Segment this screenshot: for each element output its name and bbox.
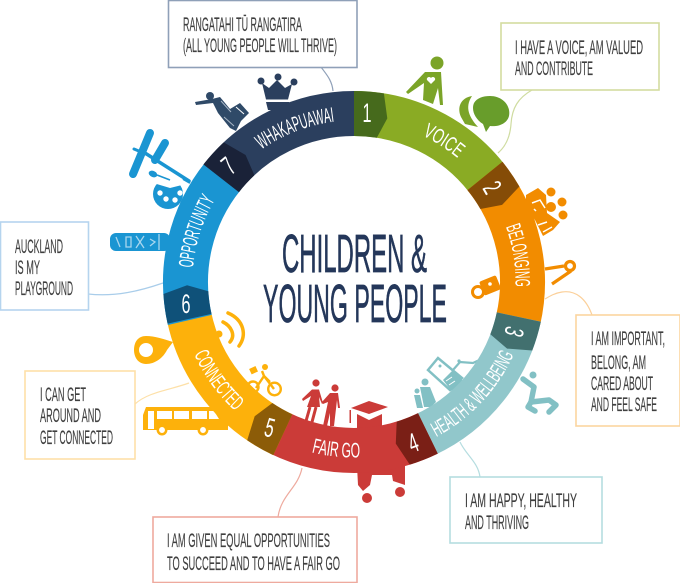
icon: cyclist [248,364,281,395]
icon: palette [148,169,190,209]
icon: carved totem [110,233,170,251]
ring label: health and wellbeing: HEALTH & WELLBEING [430,350,512,437]
callout: connected: AROUND AND [40,406,101,427]
callout: rangatahi: (ALL YOUNG PEOPLE WILL THRIVE) [183,36,337,57]
icon: map pin [134,336,173,364]
callout: voice [501,23,659,90]
connector: top box [321,67,333,91]
connector: auckland box [88,283,163,295]
icon: wifi [216,313,243,346]
icon: padlock [472,275,501,298]
ring label: whakapuawai: WHAKAPUAWAI [254,107,334,148]
number tab 5 [243,399,293,455]
ring segment: voice [354,114,487,178]
callout: health: I AM HAPPY, HEALTHY [465,491,577,512]
ring label: fair go: FAIR GO [312,438,360,458]
number tab 3 [488,312,541,354]
connector: health box [460,442,480,477]
callout: connected: I CAN GET [40,385,86,406]
title: CHILDREN & [282,224,427,284]
icon: person in chair [195,92,249,131]
callout: auckland: AUCKLAND [15,237,63,258]
icon: bus [143,407,228,434]
ring segment: belonging [485,176,522,320]
callout: auckland [0,222,88,310]
icon: couple holding hands [302,379,340,426]
connector: voice box [498,90,532,153]
icon: home and hands [428,355,490,393]
ring segment: health and wellbeing [425,317,519,435]
icon: wheelchair [357,466,405,503]
number tab 4 [387,412,438,468]
number 7: 7 [215,151,242,180]
number tab 1 [354,91,387,138]
number tab 6 [160,281,213,324]
icon: crown [258,74,298,110]
ring segment: fair go [280,433,428,450]
number 6: 6 [181,289,191,319]
icon: person with heart [406,56,444,105]
title [263,224,447,334]
icon: plane [133,133,189,181]
icon: ribbon [545,262,574,284]
callout: fair go [153,517,357,582]
text: YOUNG PEOPLE [263,274,447,334]
ring segment: connected [189,317,283,435]
connector: fair go box [278,468,302,517]
callout: belonging [576,315,680,426]
ring label: belonging: BELONGING [506,222,530,286]
number 4: 4 [404,427,423,459]
callout: health [450,477,602,543]
callout: voice: AND CONTRIBUTE [515,59,593,80]
icon: family [414,378,436,408]
ring segment: opportunity [186,176,223,320]
callout: auckland: PLAYGROUND [15,279,73,300]
number 5: 5 [261,412,278,444]
ring segment: whakapuawai [221,114,354,178]
number 1: 1 [362,98,372,128]
ring label: voice: VOICE [426,122,466,158]
callout: rangatahi [168,0,357,68]
icon: speech bubbles [459,96,509,132]
panel: ring [186,114,522,450]
number tab 2 [466,162,523,217]
icon: graduation cap [350,401,388,430]
callout: fair go: I AM GIVEN EQUAL OPPORTUNITIES [167,531,330,552]
number tab 7 [203,138,261,193]
callout: auckland: IS MY [15,258,40,279]
icon: people group [526,188,568,236]
callout: connected [25,371,135,459]
ring label: opportunity: OPPORTUNITY [178,192,214,267]
callout: connected: GET CONNECTED [40,428,113,449]
connector: connected box [135,383,189,404]
icon: active person [523,372,556,412]
callout: health: AND THRIVING [465,513,529,534]
number 3: 3 [498,323,530,340]
ring label: connected: CONNECTED [195,350,244,410]
number 2: 2 [477,176,508,199]
callout: rangatahi: RANGATAHI TŪ RANGATIRA [183,15,302,36]
callout: fair go: TO SUCCEED AND TO HAVE A FAIR GO [167,554,340,575]
connector: belonging box [545,292,592,315]
